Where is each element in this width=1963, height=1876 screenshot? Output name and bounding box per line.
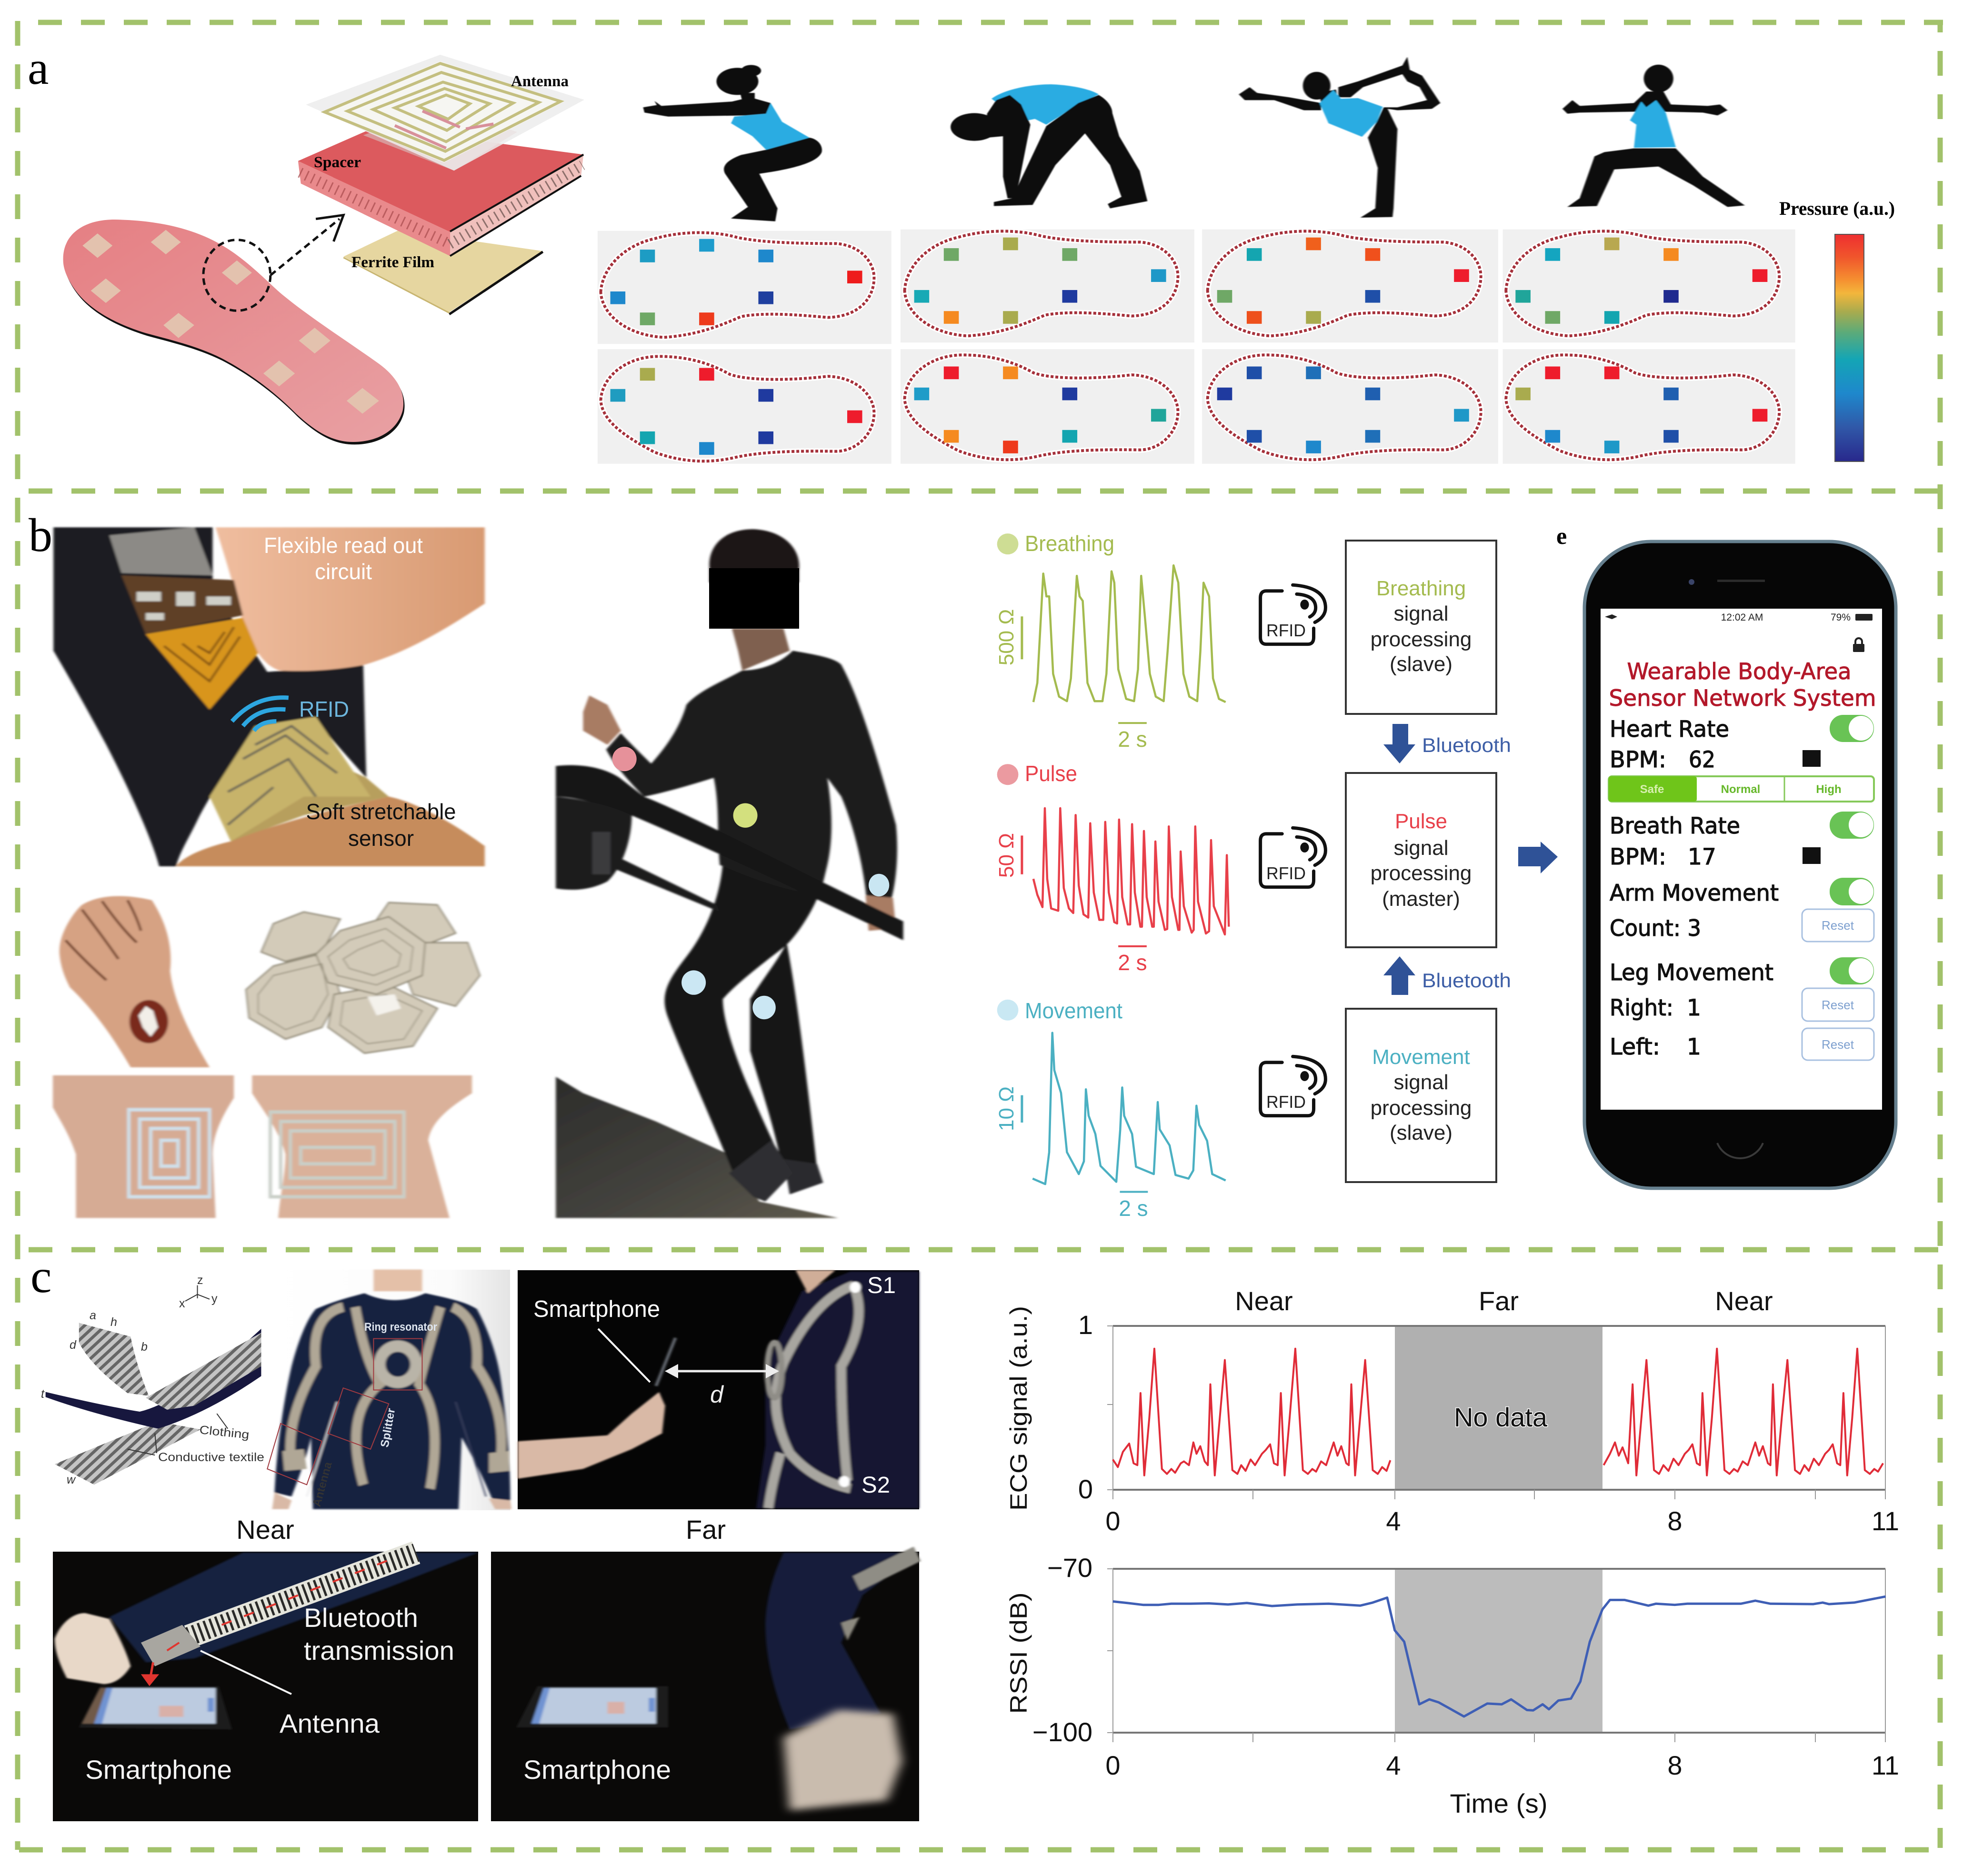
label: RFID: RFID xyxy=(299,697,349,722)
label: Antenna with pointer xyxy=(200,1651,380,1738)
photo: runner wearing sensors on treadmill xyxy=(556,529,903,1218)
box: movement signal processing: processing xyxy=(1371,1096,1472,1120)
heading: Near: Near xyxy=(236,1515,294,1545)
chart: movement signal: Movement xyxy=(1025,998,1122,1023)
x axis title: Time (s) xyxy=(1450,1788,1548,1818)
photo: flexible read-out circuit on arm xyxy=(53,527,485,866)
photo: clenched fist with skin sensor xyxy=(60,896,210,1067)
sensor markers on body xyxy=(612,747,889,1019)
diagram: conductive textile on clothing: t xyxy=(41,1387,45,1401)
chart: movement signal: 2 s xyxy=(1119,1196,1148,1221)
label: Ring resonator: Ring resonator xyxy=(364,1321,437,1334)
label: Smartphone with pointer xyxy=(533,1296,660,1382)
phone body xyxy=(1584,542,1896,1188)
heart rate block: 62 xyxy=(1689,747,1715,773)
box: breathing signal processing xyxy=(1346,541,1496,714)
chart: breathing signal xyxy=(995,531,1226,752)
diagram: conductive textile on clothing: a xyxy=(90,1309,96,1322)
label: S2: S2 xyxy=(861,1473,890,1498)
x axis values: 4 xyxy=(1386,1750,1401,1780)
label: Clothing: Clothing xyxy=(199,1423,250,1442)
heading: Far: Far xyxy=(686,1515,726,1545)
label: Soft stretchable sensor: Soft stretchable xyxy=(306,799,456,824)
header labels xyxy=(1235,1286,1773,1316)
label: Smartphone near: Smartphone xyxy=(85,1755,232,1785)
x axis values: 0 xyxy=(1105,1750,1121,1780)
safety level segmented control xyxy=(1609,776,1874,802)
smartphone app mock-up xyxy=(1584,542,1896,1188)
y axis values and title: −70 xyxy=(1047,1553,1092,1583)
status bar xyxy=(1605,612,1873,623)
label: Smartphone far: Smartphone xyxy=(523,1755,671,1785)
breath rate block: 17 xyxy=(1688,844,1716,870)
icon: RFID tag, pulse: RFID xyxy=(1266,863,1306,883)
box: movement signal processing: Movement xyxy=(1372,1045,1470,1069)
chart: RSSI vs time xyxy=(1005,1553,1899,1818)
photo: hexagonal spiral sensors xyxy=(246,903,480,1053)
heart rate block xyxy=(1610,716,1821,773)
chart: pulse signal: 2 s xyxy=(1118,950,1147,975)
button: reset arm count: Reset xyxy=(1822,918,1854,933)
chart: pulse signal: 50 Ω xyxy=(995,833,1018,878)
plot frame and no-data band xyxy=(1107,1326,1885,1499)
diagram: conductive textile on clothing: z xyxy=(197,1274,203,1287)
chart: ECG signal vs time xyxy=(1005,1286,1899,1536)
diagram: conductive textile on clothing xyxy=(41,1274,264,1486)
leg movement block xyxy=(1610,960,1773,1060)
x axis values: 8 xyxy=(1667,1750,1683,1780)
box: pulse signal processing: signal xyxy=(1394,836,1448,860)
safety level segmented control: Normal xyxy=(1721,783,1760,796)
breath rate block: Breath Rate xyxy=(1610,813,1740,839)
panel a: smart insole pressure sensing xyxy=(28,41,1895,464)
chart: pulse signal xyxy=(995,761,1229,975)
sleeve sensor strip xyxy=(141,1553,416,1666)
breath rate block: BPM: xyxy=(1610,844,1666,870)
label: Antenna with pointer: Antenna xyxy=(280,1708,380,1738)
map column 2 xyxy=(901,230,1194,464)
box: pulse signal processing xyxy=(1346,773,1496,947)
toggle: breath rate xyxy=(1830,812,1874,839)
toggle: leg movement xyxy=(1830,957,1874,984)
chart: foot pressure maps for four poses xyxy=(598,230,1795,464)
photo: smartphone at distance d from body xyxy=(518,1270,919,1509)
y axis values and title: RSSI (dB) xyxy=(1005,1593,1032,1714)
y axis values and title: −100 xyxy=(1032,1717,1092,1747)
silhouette: dancer pose xyxy=(1239,57,1440,218)
label: Flexible read out circuit xyxy=(264,533,423,584)
label: Soft stretchable sensor: sensor xyxy=(348,826,414,851)
label: Bluetooth transmission: Bluetooth xyxy=(304,1603,418,1633)
header labels: Far xyxy=(1479,1286,1519,1316)
diagram: conductive textile on clothing: w xyxy=(67,1473,76,1486)
arrow: distance d xyxy=(665,1364,779,1408)
label: Bluetooth transmission xyxy=(304,1603,454,1665)
button: reset left: Reset xyxy=(1822,1037,1854,1052)
button: reset left xyxy=(1802,1028,1874,1060)
x axis values: 8 xyxy=(1667,1506,1683,1536)
icon: RFID tag, breathing: RFID xyxy=(1266,621,1306,640)
safety level segmented control: Safe xyxy=(1640,783,1664,796)
arrow: Bluetooth up xyxy=(1383,956,1511,995)
y axis values and title xyxy=(1005,1553,1092,1747)
y axis values and title xyxy=(1005,1306,1093,1511)
x axis values: 11 xyxy=(1872,1506,1899,1536)
y axis values and title: 0 xyxy=(1078,1474,1093,1504)
legend: pressure colour bar: Pressure (a.u.) xyxy=(1779,198,1895,219)
label: Conductive textile: Conductive textile xyxy=(158,1451,264,1464)
panel label e: e xyxy=(1556,522,1567,549)
icon: RFID wireless arcs xyxy=(232,698,289,731)
chart: movement signal xyxy=(995,998,1226,1221)
silhouette: forward bend xyxy=(951,84,1147,208)
label: Ferrite Film: Ferrite Film xyxy=(351,254,434,271)
arm movement block xyxy=(1610,880,1779,942)
box: breathing signal processing: processing xyxy=(1371,628,1472,651)
arrow: distance d: d xyxy=(710,1381,724,1408)
callout: dashed circle and arrow xyxy=(203,215,343,311)
button: reset right xyxy=(1802,988,1874,1021)
y axis values and title: ECG signal (a.u.) xyxy=(1005,1306,1032,1511)
status bar: 79% xyxy=(1831,612,1851,623)
RSSI trace xyxy=(1113,1596,1885,1716)
blurred fist xyxy=(783,1710,902,1810)
diagram: conductive textile on clothing: b xyxy=(141,1340,148,1354)
chart: breathing signal: 500 Ω xyxy=(995,609,1018,665)
y axis values and title: 1 xyxy=(1078,1310,1093,1340)
chart: pulse signal: Pulse xyxy=(1025,761,1077,786)
x axis values xyxy=(1105,1506,1899,1536)
button: reset right: Reset xyxy=(1822,998,1854,1012)
leg movement block: Leg Movement xyxy=(1610,960,1773,986)
box: breathing signal processing: (slave) xyxy=(1390,652,1452,676)
status bar: 12:02 AM xyxy=(1721,612,1763,623)
breath rate block xyxy=(1610,813,1821,870)
arrow: Bluetooth down xyxy=(1383,724,1511,763)
icon: RFID tag, breathing xyxy=(1261,585,1325,644)
header labels: Near xyxy=(1715,1286,1773,1316)
box: movement signal processing: signal xyxy=(1394,1071,1448,1094)
plot frame and band xyxy=(1107,1569,1885,1742)
photo: serpentine coil sensor on wrist xyxy=(252,1075,472,1218)
app title: Sensor Network System xyxy=(1609,685,1876,712)
label: Smartphone with pointer: Smartphone xyxy=(533,1296,660,1322)
app title: Wearable Body-Area xyxy=(1627,659,1852,685)
icon: RFID tag, movement xyxy=(1261,1056,1325,1116)
box: movement signal processing: (slave) xyxy=(1390,1121,1452,1144)
leg movement block: 1 xyxy=(1687,995,1701,1021)
box: pulse signal processing: processing xyxy=(1371,862,1472,885)
button: reset arm count xyxy=(1802,909,1874,942)
leg movement block: Right: xyxy=(1610,995,1673,1021)
phone screen xyxy=(1601,609,1882,1110)
chart: breathing signal: 2 s xyxy=(1118,727,1147,752)
panel label c: c xyxy=(30,1250,51,1303)
box: pulse signal processing: (master) xyxy=(1382,887,1460,911)
heart rate block: Heart Rate xyxy=(1610,716,1729,742)
silhouette: warrior pose xyxy=(1562,65,1745,207)
diagram: conductive textile on clothing: x xyxy=(179,1297,185,1310)
toggle: heart rate xyxy=(1830,715,1874,742)
arm movement block: Count: 3 xyxy=(1610,915,1701,942)
photo: far state xyxy=(491,1552,919,1821)
label: Splitter: Splitter xyxy=(378,1407,398,1448)
box: pulse signal processing: Pulse xyxy=(1395,810,1447,833)
x axis values xyxy=(1105,1750,1899,1780)
arrow: Bluetooth down: Bluetooth xyxy=(1422,734,1511,756)
heart rate block: BPM: xyxy=(1610,747,1666,773)
label: Flexible read out circuit: Flexible read out xyxy=(264,533,423,558)
icon: lock xyxy=(1853,638,1864,652)
ECG trace xyxy=(1113,1349,1883,1475)
box: breathing signal processing: Breathing xyxy=(1376,577,1466,600)
photo: square coil sensor on wrist xyxy=(53,1075,234,1218)
map column 1 xyxy=(598,231,891,464)
diagram: conductive textile on clothing: d xyxy=(70,1338,77,1352)
arrow: Bluetooth up: Bluetooth xyxy=(1422,969,1511,992)
toggle: arm movement xyxy=(1830,878,1874,905)
leg movement block: 1 xyxy=(1687,1034,1701,1060)
no-data label: No data xyxy=(1454,1402,1548,1432)
illustration: exploded sensor layers xyxy=(298,55,584,314)
label: Flexible read out circuit: circuit xyxy=(315,559,372,584)
panel label b: b xyxy=(29,509,52,562)
photo: shirt with textile antenna xyxy=(267,1270,511,1510)
silhouette: squat xyxy=(643,65,822,221)
photo: near state xyxy=(53,1552,478,1821)
panel b: wearable RFID sensors and signal network xyxy=(29,509,1896,1221)
arrow: red transmission xyxy=(141,1662,159,1686)
leg movement block: Left: xyxy=(1610,1034,1660,1060)
box: breathing signal processing: signal xyxy=(1394,602,1448,625)
diagram: conductive textile on clothing: y xyxy=(211,1292,218,1305)
x axis values: 11 xyxy=(1872,1750,1899,1780)
panel c: textile near-field Bluetooth system xyxy=(30,1250,1899,1821)
chart: movement signal: 10 Ω xyxy=(995,1086,1018,1131)
arm movement block: Arm Movement xyxy=(1610,880,1779,906)
safety level segmented control: High xyxy=(1816,783,1842,796)
icon: RFID tag, pulse xyxy=(1261,828,1325,887)
label: Spacer: Spacer xyxy=(314,154,361,171)
illustration: insole with sensor patches xyxy=(63,220,405,444)
x axis values: 0 xyxy=(1105,1506,1121,1536)
icon: RFID tag, movement: RFID xyxy=(1266,1092,1306,1112)
label: Antenna: Antenna xyxy=(310,1460,335,1508)
box: movement signal processing xyxy=(1346,1009,1496,1182)
arrow: to smartphone xyxy=(1518,842,1558,873)
label: Soft stretchable sensor xyxy=(306,799,456,851)
map column 4 xyxy=(1503,230,1795,464)
panel label a: a xyxy=(28,41,49,94)
chart: breathing signal: Breathing xyxy=(1025,531,1114,556)
legend: pressure colour bar xyxy=(1779,198,1895,461)
header labels: Near xyxy=(1235,1286,1293,1316)
app title xyxy=(1609,659,1876,712)
label: S1: S1 xyxy=(867,1273,896,1298)
label: Antenna: Antenna xyxy=(511,73,569,90)
x axis values: 4 xyxy=(1386,1506,1401,1536)
map column 3 xyxy=(1202,230,1498,464)
label: Bluetooth transmission: transmission xyxy=(304,1635,454,1665)
diagram: conductive textile on clothing: h xyxy=(110,1315,117,1329)
face block xyxy=(709,568,799,629)
